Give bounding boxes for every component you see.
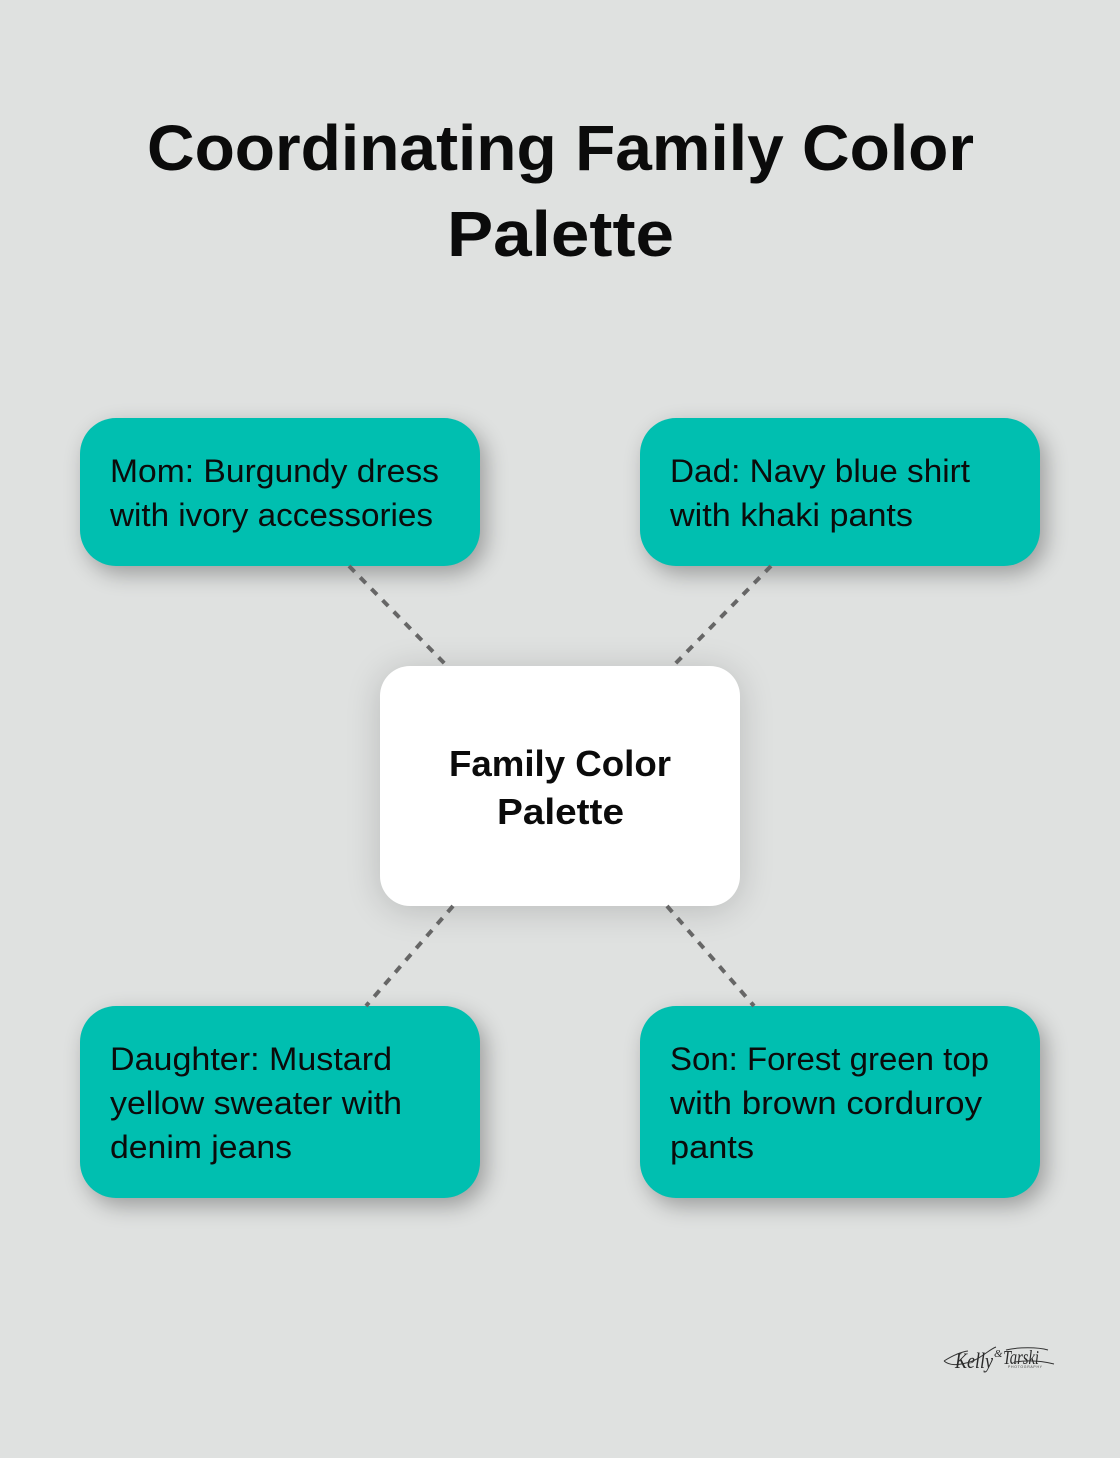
mom label: with ivory accessories xyxy=(109,497,433,533)
dad label: Dad: Navy blue shirt xyxy=(670,453,970,489)
daughter label: denim jeans xyxy=(110,1129,292,1165)
logo: signature: Tarski xyxy=(1003,1347,1039,1369)
panel: daughter card xyxy=(80,1006,480,1198)
dad label: with khaki pants xyxy=(669,497,913,533)
panel: son card xyxy=(640,1006,1040,1198)
title: Palette xyxy=(447,198,674,270)
center label: Family Color xyxy=(449,743,671,784)
daughter label: yellow sweater with xyxy=(110,1085,402,1121)
center label: Palette xyxy=(497,791,624,832)
son label: with brown corduroy xyxy=(669,1085,982,1121)
daughter label xyxy=(110,1041,402,1165)
logo: signature: & xyxy=(994,1348,1003,1360)
mom label xyxy=(109,453,439,533)
son label xyxy=(669,1041,989,1165)
panel: dad card xyxy=(640,418,1040,566)
mom label: Mom: Burgundy dress xyxy=(110,453,439,489)
logo: signature: PHOTOGRAPHY xyxy=(1008,1365,1043,1369)
son label: pants xyxy=(670,1129,754,1165)
logo: signature: Kelly xyxy=(954,1348,993,1373)
panel: center node xyxy=(380,666,740,906)
son label: Son: Forest green top xyxy=(670,1041,989,1077)
center label xyxy=(449,743,671,832)
title: Coordinating Family Color xyxy=(147,112,974,184)
title xyxy=(147,112,974,270)
panel: mom card xyxy=(80,418,480,566)
dad label xyxy=(669,453,970,533)
daughter label: Daughter: Mustard xyxy=(110,1041,392,1077)
